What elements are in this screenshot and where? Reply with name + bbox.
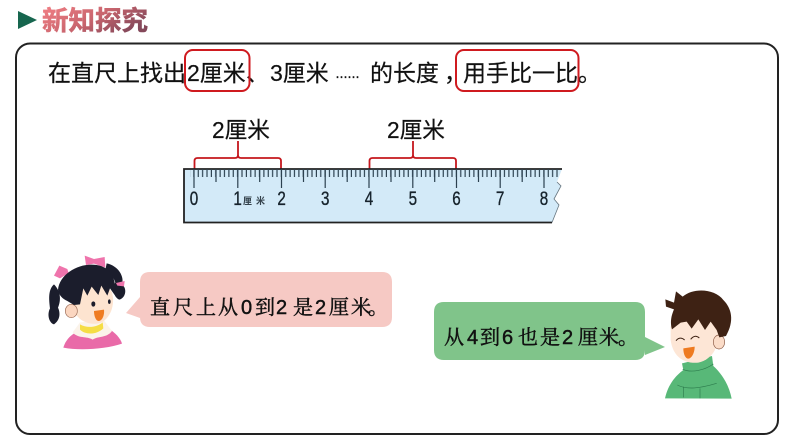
callout: boy speech bubble: 从4到6也是2厘米。	[444, 326, 638, 349]
instruction text: 的长度	[370, 60, 439, 86]
title: 新知探究	[42, 6, 148, 36]
boy: face	[671, 315, 718, 363]
ruler: 厘	[243, 196, 252, 206]
instruction text: 3厘米	[270, 60, 329, 86]
girl: mouth	[94, 310, 104, 321]
icon: title triangle	[18, 11, 37, 29]
girl: bows	[54, 256, 125, 286]
instruction text	[48, 60, 601, 86]
callout: boy speech bubble	[434, 302, 665, 360]
boy: mouth	[683, 347, 695, 359]
girl: fur collar	[73, 320, 112, 340]
ruler: 米	[256, 195, 265, 206]
girl: jacket	[63, 328, 122, 349]
boy: sweater	[665, 356, 732, 399]
character: girl	[49, 256, 125, 349]
girl: eyes	[91, 301, 95, 307]
instruction text: ，	[444, 60, 467, 86]
label: first 2厘米: 2厘米	[212, 117, 270, 143]
girl: face	[72, 284, 113, 324]
instruction text: 用手比一比	[463, 60, 578, 86]
girl: yellow scarf	[80, 322, 103, 334]
ruler	[184, 169, 562, 222]
instruction text: 。	[578, 60, 601, 86]
callout: girl speech bubble	[126, 272, 392, 327]
ruler: 012345678	[190, 187, 548, 209]
highlight: 2厘米	[185, 50, 250, 91]
bracket: 0 to 2	[194, 141, 281, 169]
character: boy	[665, 290, 732, 399]
instruction text: 在直尺上找出	[48, 60, 186, 86]
boy: sweater folds	[677, 364, 717, 398]
callout: girl speech bubble: 直尺上从0到2是2厘米。	[150, 296, 388, 319]
highlight: 用手比一比	[456, 50, 578, 91]
girl: right braid	[105, 263, 125, 300]
girl: ear	[65, 304, 77, 318]
boy: happy eyes	[676, 336, 699, 341]
label: second 2厘米: 2厘米	[387, 117, 445, 143]
instruction text: ······	[335, 68, 359, 85]
boy: hair	[665, 290, 731, 337]
instruction text: 2厘米	[187, 60, 246, 86]
girl: left braid	[49, 284, 60, 324]
instruction text: 、	[246, 60, 269, 86]
boy: ear	[713, 335, 725, 349]
bracket: 4 to 6	[370, 141, 456, 169]
girl: hair	[58, 265, 115, 305]
